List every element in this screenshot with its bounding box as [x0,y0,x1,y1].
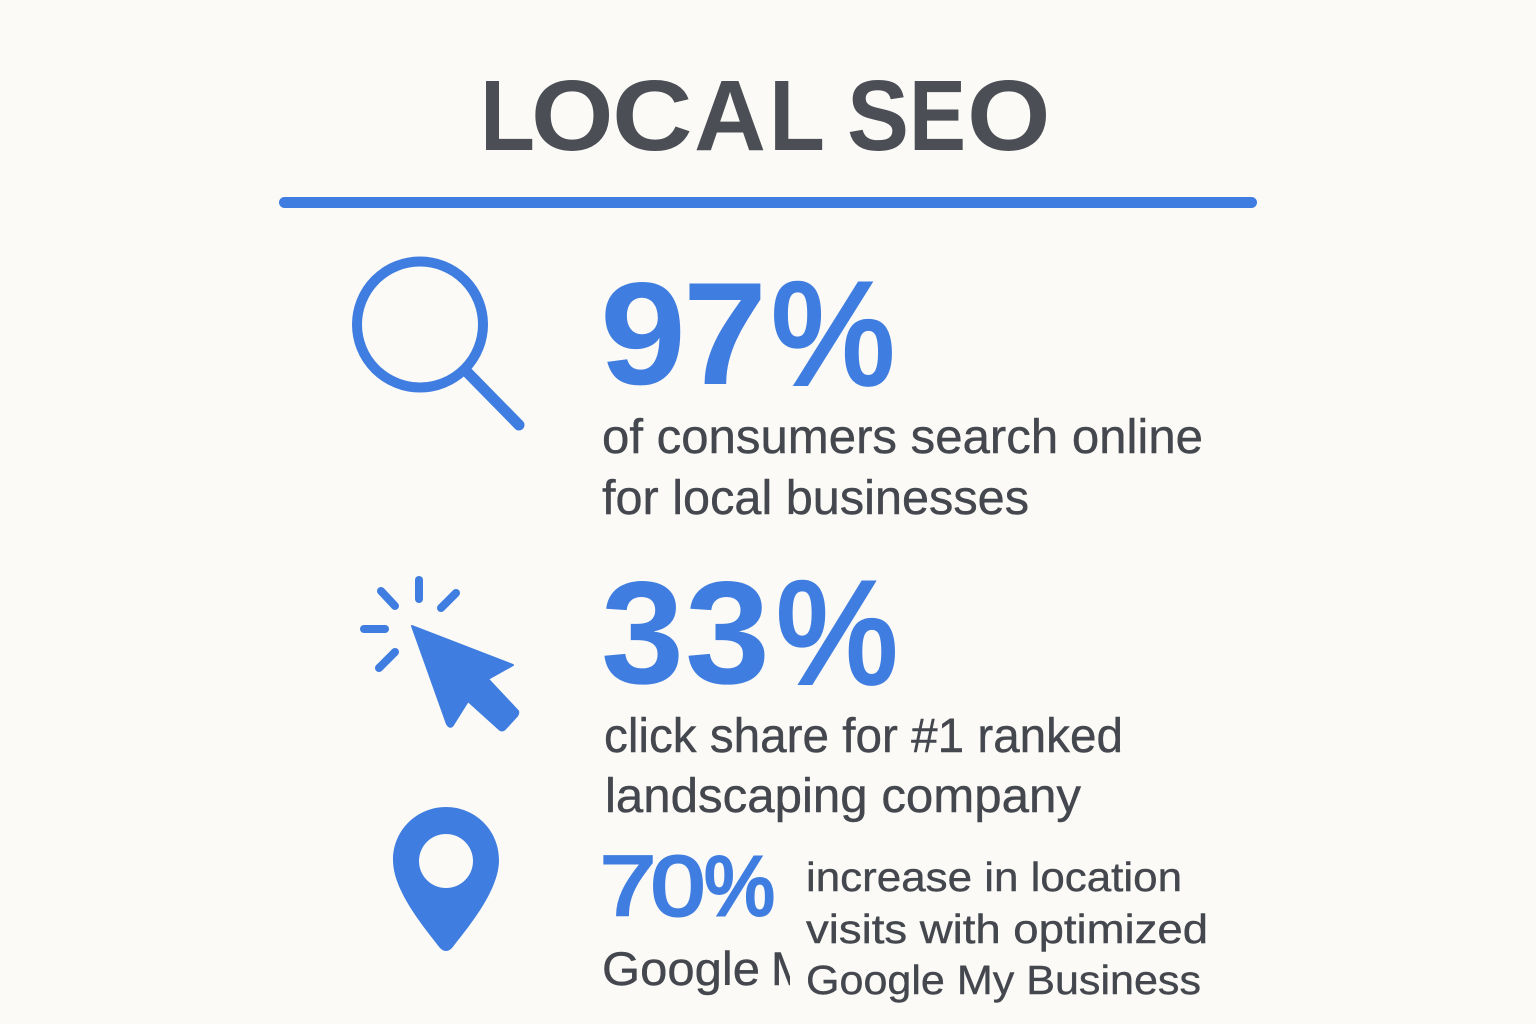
title: L [769,60,825,172]
stat number: 97%: 7 [683,252,767,415]
stat number: 70% [600,839,775,933]
clipped text: Google M [604,950,790,996]
title: S [847,60,909,172]
description: location visits: visits with optimized [806,906,1208,952]
icon: clicking cursor [364,580,518,730]
stat number: 97%: % [771,252,895,415]
title: O [967,60,1050,172]
stat row: 70% location visits [393,807,1208,1003]
title [480,60,1050,172]
description: click share: landscaping company [605,770,1081,823]
title underline [279,197,1257,208]
clipped text: Google M: Google [602,942,760,995]
title: C [612,60,693,172]
icon: magnifying glass [357,262,519,425]
title: O [531,60,614,172]
description: click share: click share for #1 ranked [604,710,1123,763]
stat row: 97% consumers search [357,252,1203,525]
stat number: 97%: 9 [600,252,686,415]
stat number: 97% [600,252,895,415]
title: L [480,60,535,172]
description: click share [604,710,1123,823]
stat row: 33% click share [364,551,1123,823]
stat number: 70%: % [704,839,775,933]
description: consumers search: for local businesses [602,472,1029,525]
description: location visits: increase in location [806,854,1182,900]
title: E [909,60,966,172]
description: consumers search: of consumers search online [602,411,1203,464]
title: A [694,60,766,172]
stat number: 33% [601,551,898,714]
stat number: 70%: 0 [651,839,705,933]
icon: location pin [393,807,499,951]
description: location visits: Google My Business [806,957,1201,1003]
description: location visits [806,854,1208,1003]
stat number: 33%: % [776,551,898,714]
clipped text: Google M: M [771,942,810,995]
description: consumers search [602,411,1203,525]
stat number: 70%: 7 [600,839,656,933]
stat number: 33%: 3 [601,551,684,714]
stat number: 33%: 3 [685,551,770,714]
